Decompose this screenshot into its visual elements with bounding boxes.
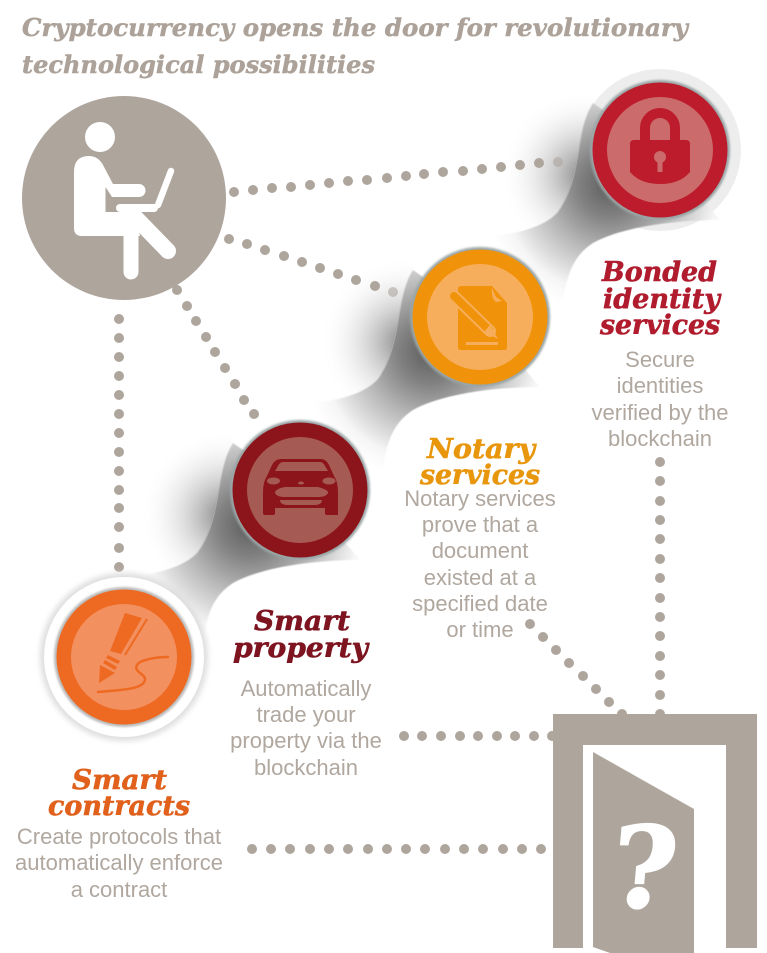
smart contracts heading: Smart: [72, 765, 168, 796]
dotted line: person to notary: [224, 234, 398, 297]
dotted line: notary to door: [525, 619, 627, 719]
dotted line: person to lock: [229, 157, 563, 197]
shadow ribbon: car to pen: [154, 442, 356, 624]
smart property description: blockchain: [254, 755, 358, 780]
icon: person with laptop: [22, 96, 226, 300]
bonded identity heading: Bonded: [601, 257, 717, 288]
dotted line: person to pen: [114, 314, 124, 572]
smart property heading: property: [233, 633, 370, 664]
dotted line: smart property to door: [399, 731, 557, 741]
bonded identity description: blockchain: [608, 426, 712, 451]
icon: lock badge: [590, 80, 730, 220]
title: technological possibilities: [22, 50, 375, 79]
icon: pen signature badge: [40, 573, 208, 741]
bonded identity description: Secure: [625, 347, 695, 372]
smart contracts description: Create protocols that: [17, 824, 221, 849]
smart contracts description: a contract: [71, 877, 167, 902]
halo: lock: [579, 69, 741, 231]
shadow ribbon: notary to car: [332, 270, 536, 453]
title: Cryptocurrency opens the door for revolutionary: [22, 13, 690, 42]
dotted line: smart contracts to door: [247, 844, 546, 854]
dotted line: person to car: [172, 285, 259, 419]
icon: notary document badge: [410, 247, 550, 387]
notary heading: services: [419, 460, 540, 491]
icon: car badge: [230, 420, 370, 560]
notary description: specified date: [412, 591, 548, 616]
notary description: prove that a: [422, 512, 539, 537]
smart property description: property via the: [230, 728, 382, 753]
smart contracts heading: contracts: [48, 791, 190, 822]
notary description: document: [432, 538, 528, 563]
smart property description: trade your: [256, 702, 356, 727]
notary description: Notary services: [404, 486, 556, 511]
question mark: ?: [606, 803, 683, 934]
smart property description: Automatically: [241, 676, 371, 701]
notary description: or time: [446, 617, 514, 642]
bonded identity description: verified by the: [592, 400, 728, 425]
dotted line: bonded identity to door: [655, 457, 665, 719]
bonded identity heading: services: [599, 310, 720, 341]
shadow ribbon: lock to notary: [512, 102, 716, 286]
bonded identity heading: identity: [603, 284, 722, 315]
notary description: existed at a: [424, 565, 537, 590]
notary heading: Notary: [426, 434, 537, 465]
smart contracts description: automatically enforce: [15, 850, 223, 875]
icon: door with question mark: [553, 714, 757, 953]
bonded identity description: identities: [617, 373, 703, 398]
smart property heading: Smart: [254, 606, 351, 637]
